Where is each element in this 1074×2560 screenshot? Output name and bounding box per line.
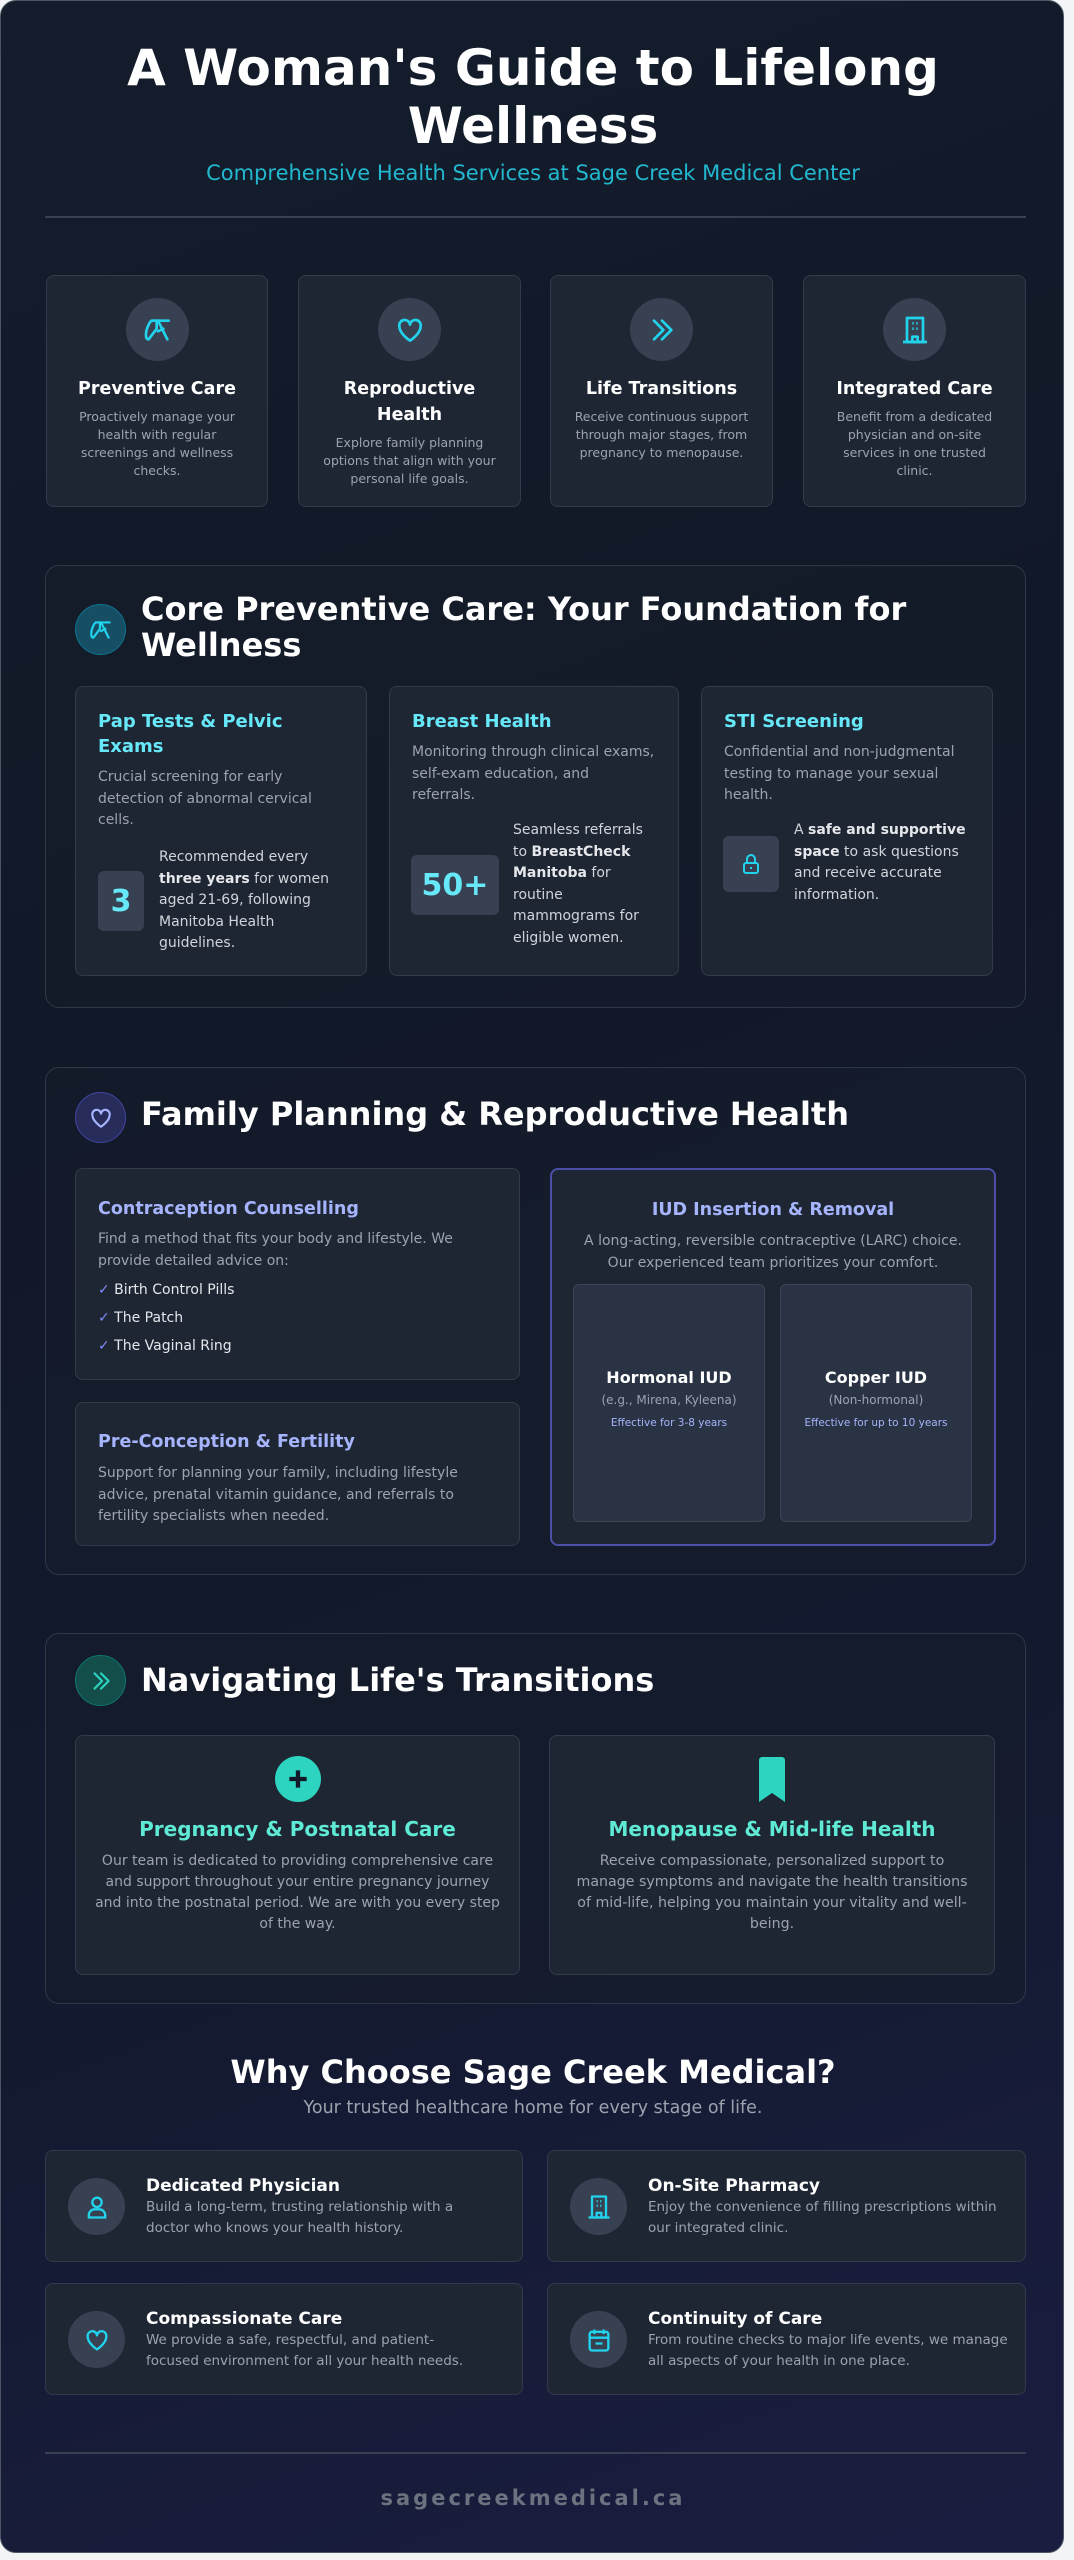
- IUD option: copper: Copper IUD: [825, 1368, 927, 1387]
- icon: heart: [68, 2311, 125, 2368]
- checklist: ✓ The Patch: [98, 1310, 183, 1326]
- icon: heart header: [75, 1092, 126, 1143]
- icon: lungs header: [75, 604, 126, 655]
- subcard: pap tests: [75, 686, 367, 976]
- subcard: pap tests: Pap Tests & Pelvic: [98, 711, 283, 732]
- why card: continuity of care: [547, 2283, 1026, 2395]
- subcard: IUD: [550, 1168, 996, 1546]
- why card: on-site pharmacy: Enjoy the convenience of filling prescriptions within our integrated clinic.: [648, 2199, 997, 2236]
- subcard: pre-conception: [75, 1402, 520, 1546]
- feature card: Preventive Care: Proactively manage your health with regular screenings and wellness checks.: [79, 409, 235, 478]
- subcard: pap tests: Recommended every three years for women aged 21-69, following Manitoba Health guidelines.: [159, 849, 329, 951]
- IUD option: copper: (Non-hormonal): [829, 1393, 923, 1407]
- subcard: menopause: Menopause & Mid-life Health: [608, 1817, 936, 1841]
- why card: compassionate care: Compassionate Care: [146, 2309, 342, 2329]
- stat: 50+: 50+: [422, 868, 488, 902]
- feature card: Life Transitions: Receive continuous support through major stages, from pregnancy to menopause.: [575, 409, 748, 460]
- subcard: contraception: Contraception Counselling: [98, 1199, 359, 1219]
- icon: chevrons: [630, 298, 693, 361]
- feature card: Preventive Care: Preventive Care: [78, 379, 236, 399]
- heading: family planning: Family Planning & Reproductive Health: [141, 1095, 849, 1133]
- subcard: STI screening: A safe and supportive space to ask questions and receive accurate information.: [794, 822, 966, 902]
- panel: life transitions: [45, 1633, 1026, 2004]
- feature card: Reproductive Health: Explore family planning options that align with your personal life goals.: [323, 435, 496, 486]
- subcard: breast health: Breast Health: [412, 711, 552, 732]
- subcard: pregnancy: Our team is dedicated to providing comprehensive care and support throughout your entire pregnancy journey and into the postnatal period. We are with you every step of the way.: [95, 1853, 500, 1932]
- icon: building: [883, 298, 946, 361]
- IUD option: copper: Effective for up to 10 years: [804, 1417, 948, 1429]
- icon: plus circle: [274, 1756, 320, 1802]
- heading: core preventive care: Wellness: [141, 626, 301, 664]
- subcard: IUD: A long-acting, reversible contraceptive (LARC) choice. Our experienced team prioritizes your comfort.: [584, 1233, 962, 1270]
- subtitle: Comprehensive Health Services at Sage Creek Medical Center: [206, 161, 860, 185]
- subcard: STI screening: Confidential and non-judgmental testing to manage your sexual health.: [724, 744, 954, 803]
- subcard: contraception: Find a method that fits your body and lifestyle. We provide detailed advice on:: [98, 1231, 453, 1268]
- heading: why choose: Why Choose Sage Creek Medical?: [230, 2053, 836, 2091]
- feature card: Integrated Care: [803, 275, 1026, 507]
- feature card: Preventive Care: [46, 275, 268, 507]
- feature card: Reproductive Health: [298, 275, 521, 507]
- panel: family planning: [45, 1067, 1026, 1575]
- heading: core preventive care: Core Preventive Care: Your Foundation for: [141, 590, 906, 628]
- subcard: menopause: [549, 1735, 995, 1975]
- why card: continuity of care: Continuity of Care: [648, 2309, 822, 2329]
- subcard: STI screening: [701, 686, 993, 976]
- icon: calendar: [570, 2311, 627, 2368]
- feature card: Integrated Care: Integrated Care: [836, 379, 993, 399]
- why card: compassionate care: We provide a safe, respectful, and patient-focused environment for all your health needs.: [146, 2332, 463, 2369]
- heading: transitions: Navigating Life's Transitions: [141, 1661, 654, 1699]
- title: A Woman's Guide to Lifelong: [127, 39, 939, 97]
- IUD option: hormonal: Effective for 3-8 years: [611, 1417, 727, 1429]
- why card: dedicated physician: Dedicated Physician: [146, 2176, 340, 2196]
- subcard: menopause: Receive compassionate, personalized support to manage symptoms and navigate the health transitions of mid-life, helping you maintain your vitality and well-being.: [577, 1853, 967, 1932]
- subcard: pregnancy: Pregnancy & Postnatal Care: [139, 1817, 456, 1841]
- why card: compassionate care: [45, 2283, 523, 2395]
- title: Wellness: [408, 97, 658, 155]
- feature card: Life Transitions: [550, 275, 773, 507]
- icon: lungs: [126, 298, 189, 361]
- feature card: Reproductive Health: Reproductive Health: [344, 379, 475, 425]
- why card: on-site pharmacy: [547, 2150, 1026, 2262]
- subcard: pregnancy: [75, 1735, 520, 1975]
- subcard: pre-conception: Pre-Conception & Fertility: [98, 1432, 355, 1452]
- feature card: Integrated Care: Benefit from a dedicated physician and on-site services in one trusted clinic.: [837, 409, 992, 478]
- icon: person: [68, 2178, 125, 2235]
- footer: website: sagecreekmedical.ca: [380, 2486, 685, 2510]
- heading: core preventive care: [141, 590, 906, 664]
- icon: building: [570, 2178, 627, 2235]
- subcard: pap tests: Exams: [98, 736, 164, 757]
- subheading: why choose: Your trusted healthcare home for every stage of life.: [304, 2098, 762, 2118]
- subcard: breast health: Seamless referrals to BreastCheck Manitoba for routine mammograms for eligible women.: [513, 822, 643, 946]
- title: [127, 39, 939, 155]
- checklist: ✓ Birth Control Pills: [98, 1282, 234, 1298]
- checklist: ✓ The Vaginal Ring: [98, 1338, 232, 1354]
- feature card: Life Transitions: Life Transitions: [586, 379, 737, 399]
- stat: 3: [98, 871, 144, 931]
- IUD option: hormonal: Hormonal IUD: [606, 1368, 732, 1387]
- why card: continuity of care: From routine checks to major life events, we manage all aspects of your health in one place.: [648, 2332, 1008, 2369]
- stat: 3: 3: [111, 884, 131, 918]
- subcard: pap tests: Crucial screening for early detection of abnormal cervical cells.: [98, 769, 312, 828]
- subcard: IUD: IUD Insertion & Removal: [652, 1200, 894, 1220]
- stat: 50+: [411, 855, 499, 915]
- why card: dedicated physician: [45, 2150, 523, 2262]
- icon: bookmark: [759, 1757, 785, 1802]
- icon: lock: [723, 836, 779, 892]
- subcard: breast health: [389, 686, 679, 976]
- subcard: pre-conception: Support for planning your family, including lifestyle advice, prenatal vitamin guidance, and referrals to fertility specialists when needed.: [98, 1465, 458, 1524]
- why card: on-site pharmacy: On-Site Pharmacy: [648, 2176, 820, 2196]
- IUD option: hormonal: (e.g., Mirena, Kyleena): [601, 1393, 737, 1407]
- IUD option: copper: [780, 1284, 972, 1522]
- subcard: STI screening: STI Screening: [724, 711, 864, 732]
- panel: core preventive care: [45, 565, 1026, 1008]
- subcard: contraception: [75, 1168, 520, 1380]
- subcard: breast health: Monitoring through clinical exams, self-exam education, and referrals.: [412, 744, 654, 803]
- checklist: [98, 1282, 234, 1354]
- why card: dedicated physician: Build a long-term, trusting relationship with a doctor who knows your health history.: [146, 2199, 453, 2236]
- icon: chevrons header: [75, 1655, 126, 1706]
- IUD option: hormonal: [573, 1284, 765, 1522]
- icon: heart: [378, 298, 441, 361]
